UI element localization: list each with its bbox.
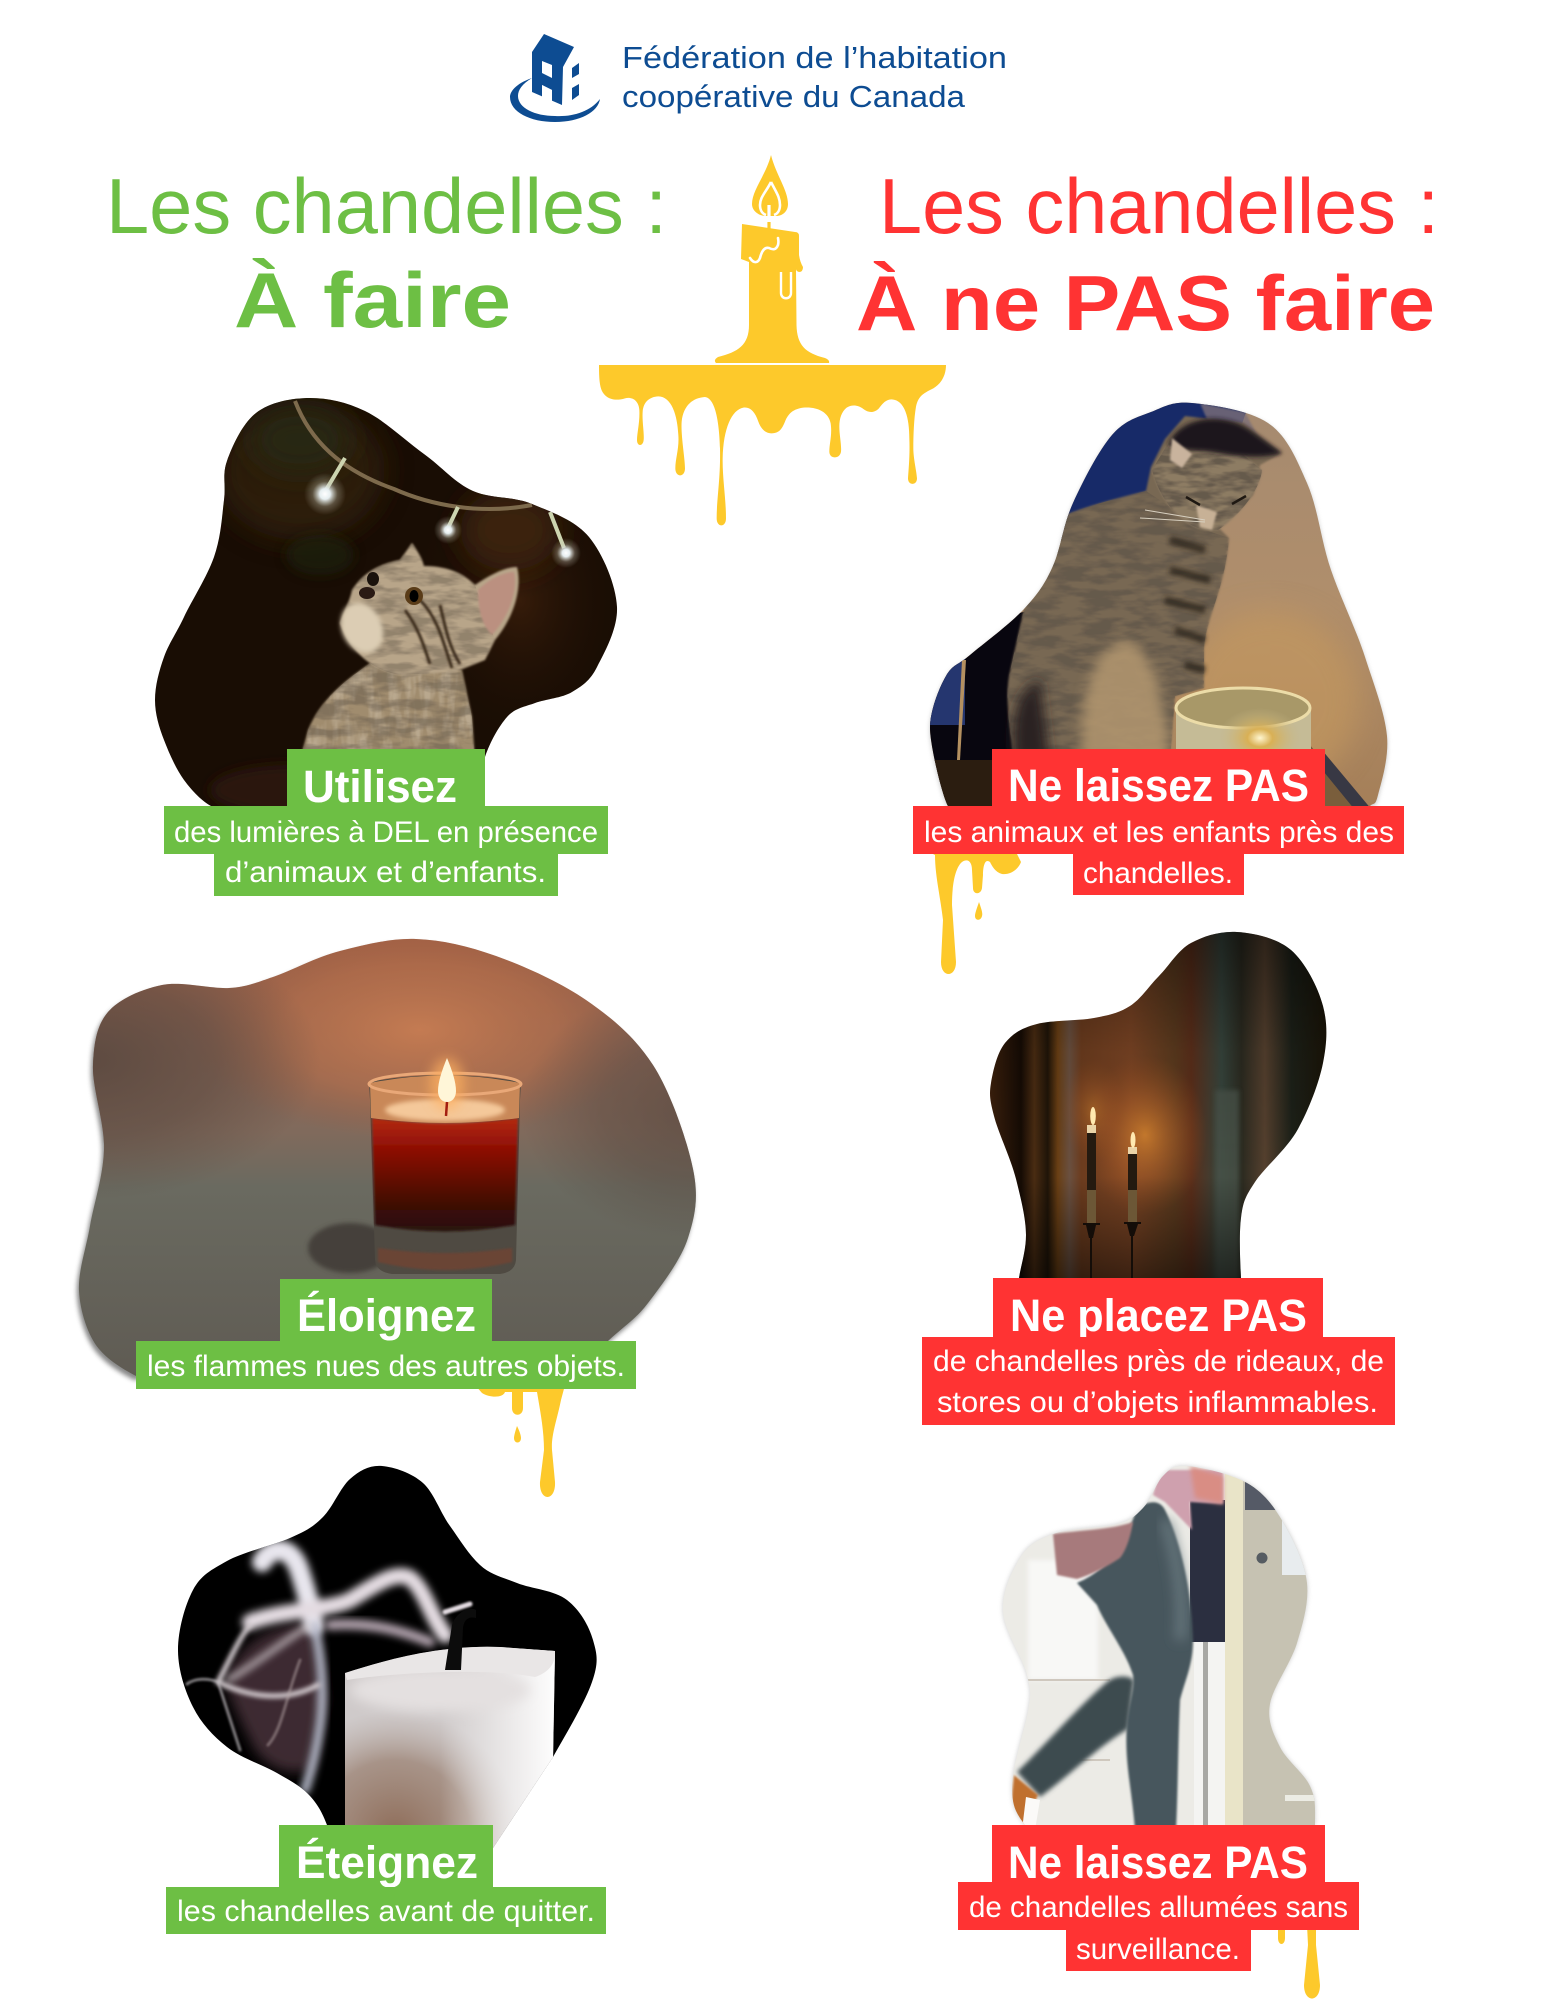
icon: wax drips under candle: [599, 365, 946, 525]
floor and baseboard: [1311, 746, 1352, 806]
label: Utilisez: [287, 749, 485, 812]
heading: do: Les chandelles :: [106, 162, 667, 250]
text: curtains and blinds: de chandelles près de rideaux, de: [933, 1345, 1384, 1378]
text: curtains and blinds: [922, 1337, 1395, 1425]
photo: candles by curtains: [985, 925, 1330, 1285]
label: Ne placez PAS: Ne placez PAS: [1010, 1290, 1307, 1341]
cat body: [1008, 416, 1282, 760]
label: Éloignez: Éloignez: [297, 1290, 476, 1341]
panel: keep flames away: [74, 938, 698, 1389]
white candle: [345, 1646, 555, 1848]
cat head: [1152, 440, 1262, 530]
glass candle holder: [1176, 711, 1311, 749]
photo: snuffed white candle with smoke: [178, 1466, 597, 1848]
logo text: coopérative du Canada: [622, 79, 966, 114]
text: before leaving: les chandelles avant de quitter.: [177, 1895, 595, 1928]
label: Ne laissez PAS: Ne laissez PAS: [1008, 760, 1309, 811]
photo: cat near candle: [925, 400, 1395, 810]
logo text: Fédération de l’habitation: [622, 40, 1007, 75]
candle glass: [369, 1075, 521, 1274]
label: Utilisez: Utilisez: [303, 761, 457, 812]
text: unattended candles: de chandelles allumées sans: [969, 1891, 1348, 1924]
text: before leaving: [166, 1887, 606, 1934]
back leg: [1017, 1676, 1134, 1797]
icon: drip under panel 2: [925, 850, 1021, 974]
photo: kitten under lights: [150, 395, 630, 815]
text: pets and children: chandelles.: [1083, 857, 1233, 890]
icon: drip under panel 3: [475, 1385, 565, 1497]
photo: lit red candle in glass: [74, 938, 698, 1383]
panel: use LED lights: [150, 395, 630, 896]
label: Éteignez: Éteignez: [296, 1837, 478, 1888]
heading: do: [106, 162, 667, 344]
heading: do: À faire: [234, 256, 511, 344]
logo: Fédération de l'habitation coopérative du Canada: [510, 34, 1007, 122]
text: curtains and blinds: stores ou d’objets inflammables.: [937, 1386, 1378, 1419]
heading: do not: Les chandelles :: [879, 162, 1439, 250]
text: unattended candles: [958, 1882, 1359, 1971]
front leg: [1077, 1502, 1193, 1830]
text: pets and children: [913, 806, 1404, 895]
kitten body: [302, 662, 476, 749]
shirt: [1053, 1522, 1133, 1579]
icon: house with swoosh: [510, 34, 600, 122]
text: LED lights: [164, 806, 608, 896]
text: other objects: [136, 1341, 636, 1389]
text: LED lights: des lumières à DEL en présence: [174, 816, 598, 849]
panel: leave pets and children: [913, 400, 1404, 895]
heading: do not: [856, 162, 1439, 347]
panel: unattended: [958, 1460, 1359, 1998]
text: other objects: les flammes nues des autres objets.: [147, 1350, 625, 1383]
icon: melting candle: [599, 155, 946, 525]
logo text: [622, 40, 1007, 114]
label: Ne laissez PAS: Ne laissez PAS: [1008, 1837, 1308, 1888]
photo: person walking out door: [1000, 1460, 1327, 1832]
text: unattended candles: surveillance.: [1076, 1933, 1240, 1966]
text: pets and children: les animaux et les enfants près des: [924, 816, 1394, 849]
text: LED lights: d’animaux et d’enfants.: [225, 856, 546, 889]
icon: drip under panel 6: [1278, 1925, 1320, 1998]
label: Éteignez: [279, 1825, 493, 1888]
panel: extinguish: [166, 1460, 606, 1934]
kitten head: [340, 543, 519, 675]
heading: do not: À ne PAS faire: [856, 259, 1435, 347]
panel: curtains: [922, 925, 1395, 1425]
